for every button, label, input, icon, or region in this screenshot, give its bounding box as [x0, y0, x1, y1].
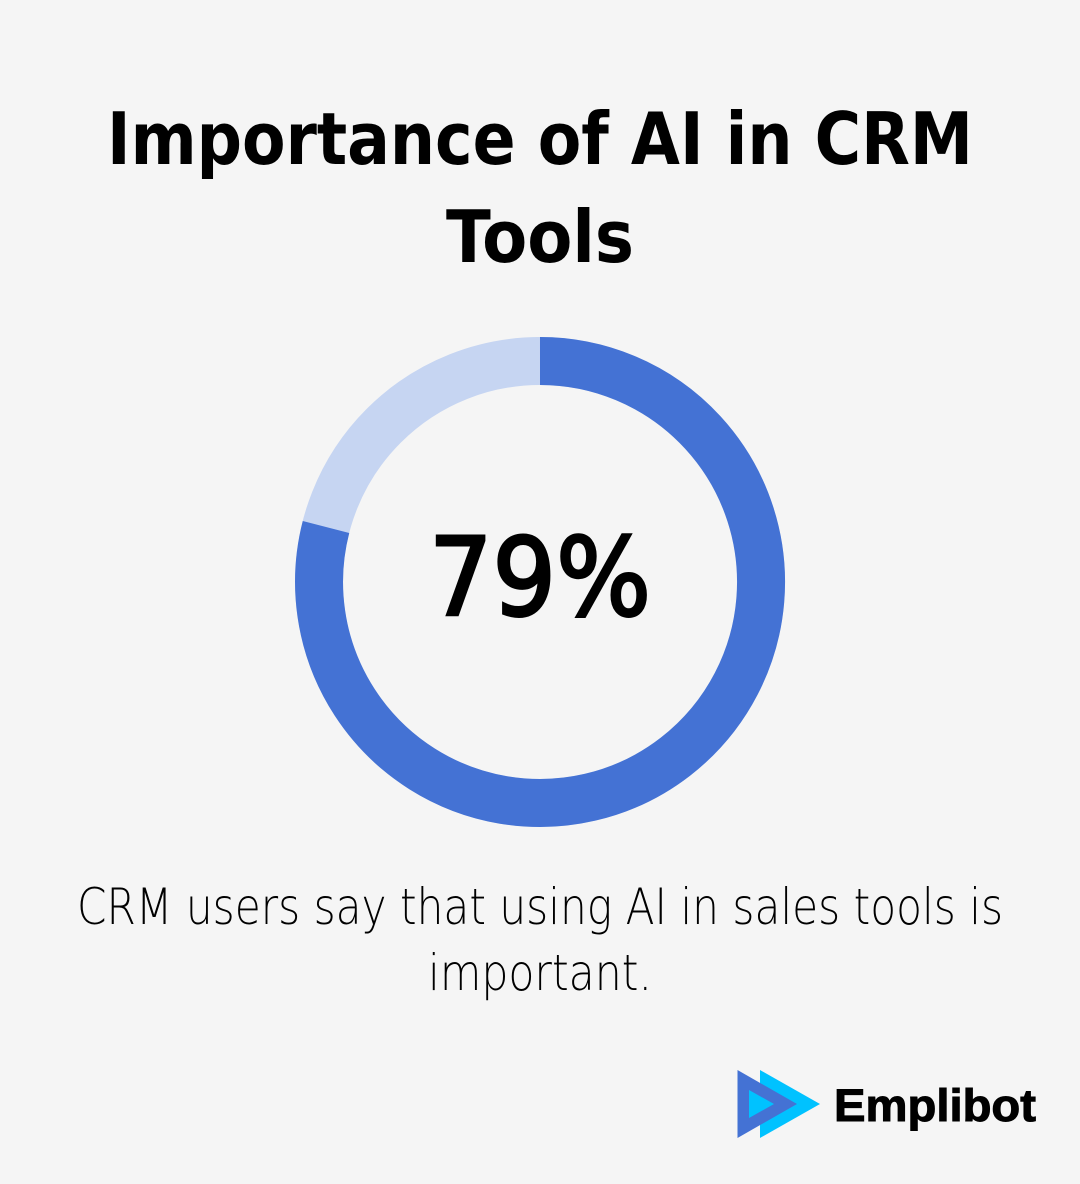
logo: Emplibot: Emplibot — [834, 1080, 1036, 1131]
donut value: 79% — [429, 516, 651, 641]
title: Tools — [446, 195, 634, 279]
logo: Emplibot — [738, 1070, 1036, 1138]
title: Importance of AI in CRM — [107, 97, 973, 181]
title — [107, 97, 973, 279]
description text: important. — [428, 944, 652, 1002]
donut chart: 79% — [319, 361, 761, 803]
description text — [77, 878, 1003, 1002]
